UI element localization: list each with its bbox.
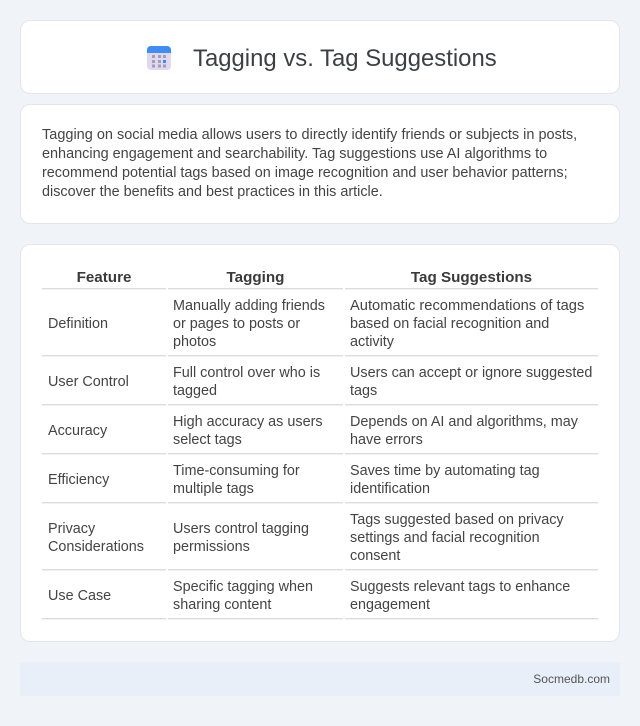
intro text: Tagging on social media allows users to directly identify friends or subjects in posts,: [42, 127, 577, 143]
row: Definition: [48, 298, 584, 350]
row: User Control: tags: [350, 383, 377, 399]
row: Accuracy: Depends on AI and algorithms, may: [350, 414, 578, 430]
row: User Control: User Control: [48, 374, 129, 390]
row: User Control: [48, 365, 592, 399]
intro text: recommend potential tags based on image recognition and user behavior patterns;: [42, 165, 568, 181]
row: Privacy Considerations: Considerations: [48, 539, 144, 555]
intro text: [42, 127, 577, 200]
table header: Tagging: Tagging: [227, 269, 284, 286]
panel: title card: [20, 20, 620, 94]
row: Privacy Considerations: permissions: [173, 539, 250, 555]
row: Privacy Considerations: [48, 512, 564, 564]
row: Use Case: Suggests relevant tags to enhance: [350, 579, 570, 595]
row: Accuracy: have errors: [350, 432, 423, 448]
title: Tagging vs. Tag Suggestions: [193, 45, 497, 72]
row: Use Case: Use Case: [48, 588, 111, 604]
panel: intro: [20, 104, 620, 224]
row: Definition: activity: [350, 334, 394, 350]
row: Use Case: Specific tagging when: [173, 579, 313, 595]
row: Efficiency: identification: [350, 481, 430, 497]
row: Definition: Automatic recommendations of tags: [350, 298, 584, 314]
row: Definition: or pages to posts or: [173, 316, 300, 332]
row: Use Case: [48, 579, 570, 613]
row: Privacy Considerations: settings and facial recognition: [350, 530, 540, 546]
table header: Tag Suggestions: Tag Suggestions: [411, 269, 532, 286]
row: Efficiency: Efficiency: [48, 472, 109, 488]
row: User Control: Full control over who is: [173, 365, 320, 381]
table header: Feature: Feature: [77, 269, 131, 286]
icon: calendar: [147, 46, 171, 70]
row: Efficiency: Time-consuming for: [173, 463, 300, 479]
row: Privacy Considerations: Users control tagging: [173, 521, 309, 537]
row: Accuracy: [48, 414, 578, 448]
row: Privacy Considerations: consent: [350, 548, 400, 564]
footer bar: [20, 662, 620, 696]
row: Privacy Considerations: Tags suggested based on privacy: [350, 512, 564, 528]
row: Definition: photos: [173, 334, 216, 350]
row: Definition: Definition: [48, 316, 108, 332]
row: Use Case: engagement: [350, 597, 430, 613]
row: User Control: Users can accept or ignore suggested: [350, 365, 592, 381]
row: Definition: based on facial recognition and: [350, 316, 549, 332]
row: Efficiency: Saves time by automating tag: [350, 463, 540, 479]
intro text: discover the benefits and best practices in this article.: [42, 184, 383, 200]
row: Efficiency: [48, 463, 540, 497]
row: User Control: tagged: [173, 383, 217, 399]
row: Accuracy: Accuracy: [48, 423, 107, 439]
row: Definition: Manually adding friends: [173, 298, 325, 314]
row: Privacy Considerations: Privacy: [48, 521, 95, 537]
row: Efficiency: multiple tags: [173, 481, 254, 497]
intro text: enhancing engagement and searchability. Tag suggestions use AI algorithms to: [42, 146, 547, 162]
row: Use Case: sharing content: [173, 597, 271, 613]
footer text: Socmedb.com: [533, 672, 610, 686]
row: Accuracy: High accuracy as users: [173, 414, 323, 430]
panel: comparison table: [20, 244, 620, 642]
row: Accuracy: select tags: [173, 432, 242, 448]
